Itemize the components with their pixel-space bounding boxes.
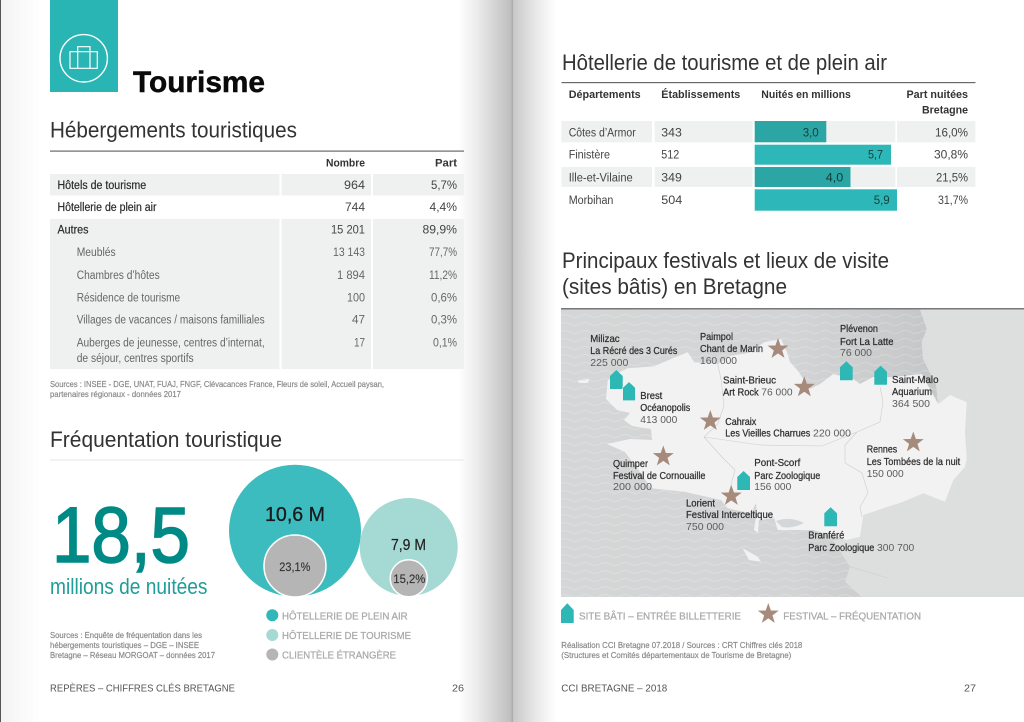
map label: Saint-Malo: Aquarium [892,386,932,398]
section tab with suitcase icon [50,0,118,92]
table: hébergements: Nombre [326,158,365,170]
title: Tourisme [133,66,265,99]
map label: Quimper [613,458,706,493]
map label: Lorient: 750 000 [686,521,724,533]
map label: Milizac: Milizac [590,333,620,345]
table: nuitées par département: Nuités en millions [761,89,851,101]
map label: Branféré [808,530,914,554]
islands and peninsula [578,379,761,562]
gulf of Morbihan [776,519,804,528]
footer: right page: 27 [964,684,976,694]
table: nuitées par département: 504 [661,195,683,207]
credits: Réalisation CCI Bretagne 07.2018 / Sources : CRT Chiffres clés 2018 [561,640,803,650]
table: hébergements: Part [435,158,457,170]
map label: Pont-Scorf: Parc Zoologique [754,470,820,482]
footer: left page: 26 [452,684,464,694]
bars: nuitées en millions: 3,0 [803,127,819,139]
credits: (Structures et Comités départementaux de Tourisme de Bretagne) [561,650,791,660]
sources: hébergements: Sources : INSEE - DGE, UNAT, FUAJ, FNGF, Clévacances France, Fleurs de soleil, Accueil paysan, [50,379,384,389]
map label: Saint-Brieuc: 76 000 [761,386,793,398]
table: hébergements: 4,4% [430,202,457,214]
bubble chart: hôtellerie de tourisme: 7,9 M [391,537,426,554]
legend: map [561,603,921,623]
map label: Rennes: 150 000 [867,468,904,480]
map label: Branféré: 300 700 [877,542,914,554]
table: hébergements: 0,1% [433,338,457,350]
heading: principaux festivals [562,248,889,299]
table: nuitées par département: Côtes d’Armor [569,127,636,139]
table: hébergements: 100 [347,292,365,304]
table: hébergements: 89,9% [422,224,457,236]
map label: Plévenon: Fort La Latte [840,336,894,348]
map label: Quimper: Quimper [613,458,648,470]
table: nuitées par département: Morbihan [569,195,613,207]
bubble chart: hôtellerie de tourisme [360,498,458,597]
legend: map: SITE BÂTI – ENTRÉE BILLETTERIE [579,610,741,622]
map label: Brest: Brest [640,390,662,402]
map label: Cahraix: Cahraix [725,416,757,428]
map label: Saint-Malo: Saint-Malo [892,374,939,386]
table: hébergements: 1 894 [337,270,366,282]
table: hébergements: Autres [58,224,89,236]
table: hébergements: Hôtellerie de plein air [58,202,157,214]
footer: right page: CCI BRETAGNE – 2018 [561,684,668,694]
table: nuitées par département: Bretagne [922,104,968,116]
table: nuitées par département: Finistère [569,150,610,162]
bubble chart: hôtellerie de tourisme: 15,2% [393,574,425,586]
sources: fréquentation: hébergements touristiques – DGE – INSEE [50,640,199,650]
panel: right page [561,50,1024,694]
table: hébergements: 964 [344,180,366,192]
map label: Milizac: La Récré des 3 Curés [590,345,677,357]
sources: hébergements [50,379,384,399]
bars: nuitées en millions: 5,9 [874,195,890,207]
heading: fréquentation touristique: Fréquentation touristique [50,427,282,452]
map label: Lorient: Lorient [686,498,715,510]
table: hébergements: Hôtels de tourisme [58,180,146,192]
map label: Lorient [686,498,773,533]
table: hébergements: 47 [352,314,365,326]
table: nuitées par département: 512 [661,150,679,162]
table: hébergements [50,158,464,369]
sources: fréquentation [50,630,215,660]
bars: nuitées en millions [755,121,897,211]
sources: fréquentation: Sources : Enquête de fréquentation dans les [50,630,202,640]
map label: Milizac: 225 000 [590,357,628,369]
bars: nuitées en millions: 4,0 [826,172,843,184]
map label: Rennes [867,444,960,480]
map background: sea [561,310,1024,597]
map label: Brest: 413 000 [640,414,677,426]
table: nuitées par département [561,88,975,211]
table: hébergements: 5,7% [431,180,457,192]
legend: map: FESTIVAL – FRÉQUENTATION [783,610,921,622]
map: Bretagne [561,310,1024,597]
legend: bubble chart [266,609,411,662]
table: nuitées par département: 30,8% [934,150,968,162]
table: hébergements: Villages de vacances / maisons familliales [77,314,265,326]
department borders [704,364,888,578]
map label: Plévenon [840,323,894,359]
map label: Lorient: Festival Interceltique [686,509,773,521]
bubble chart: hôtellerie de plein air: 10,6 M [265,504,325,526]
footer: right page [561,684,976,694]
table: hébergements: 11,2% [429,270,457,282]
table: hébergements: Auberges de jeunesse, centres d’internat, [77,338,265,350]
map label: Plévenon: Plévenon [840,323,878,335]
heading: hôtellerie de tourisme et de plein air: Hôtellerie de tourisme et de plein air [562,50,887,75]
table: nuitées par département: 349 [661,172,682,184]
map label: Saint-Brieuc [723,374,793,398]
footer: left page: REPÈRES – CHIFFRES CLÉS BRETAGNE [50,682,235,694]
heading: principaux festivals: Principaux festivals et lieux de visite [562,248,889,273]
map label: Paimpol [700,331,763,367]
footer: left page [50,682,464,694]
table: hébergements: 0,3% [431,314,457,326]
sources: fréquentation: Bretagne – Réseau MORGOAT – données 2017 [50,650,215,660]
map label: Paimpol: 160 000 [700,355,737,367]
key figure: 18,5 millions de nuitées: 18,5 [52,490,190,579]
legend: bubble chart: HÔTELLERIE DE PLEIN AIR [282,610,408,622]
table: hébergements: 15 201 [331,224,365,236]
table: nuitées par département: 343 [661,127,682,139]
map markers: festivals [653,338,924,505]
neighbouring land [833,310,1024,597]
map label: Quimper: Festival de Cornouaille [613,470,706,482]
map label: Paimpol: Paimpol [700,331,733,343]
table: hébergements: 0,6% [431,292,457,304]
table: hébergements: de séjour, centres sportifs [77,353,194,365]
bubble chart: hôtellerie de plein air: 23,1% [279,562,310,574]
map label: Saint-Malo: 364 500 [892,398,930,410]
table: nuitées par département: 21,5% [936,172,968,184]
heading: principaux festivals: (sites bâtis) en Bretagne [562,274,787,299]
map label: Pont-Scorf: 156 000 [754,481,791,493]
bars: nuitées en millions: 5,7 [868,150,883,162]
table: nuitées par département: Départements [569,89,641,101]
map label: Paimpol: Chant de Marin [700,343,763,355]
key figure: 18,5 millions de nuitées: millions de nuitées [50,574,208,599]
map label: Saint-Malo [892,374,939,410]
table: hébergements: Chambres d’hôtes [77,270,160,282]
map label: Quimper: 200 000 [613,481,652,493]
map label: Cahraix: Les Vieilles Charrues [725,428,810,440]
map label: Milizac [590,333,677,369]
legend: bubble chart: CLIENTÈLE ÉTRANGÈRE [282,648,396,662]
table: nuitées par département: Ille-et-Vilaine [569,172,633,184]
panel: left page [50,0,464,694]
table: hébergements: 744 [345,202,366,214]
bubble chart: hôtellerie de plein air [229,465,361,597]
heading: hébergements touristiques: Hébergements touristiques [50,118,297,142]
table: nuitées par département: 31,7% [938,195,968,207]
land: Brittany [606,339,967,540]
table: hébergements: Meublés [77,247,116,259]
table: hébergements: Résidence de tourisme [77,292,180,304]
table: hébergements: 13 143 [333,247,365,259]
map label: Saint-Brieuc: Art Rock [723,386,759,398]
map label: Rennes: Rennes [867,444,897,456]
table: hébergements: 77,7% [429,247,457,259]
map label: Pont-Scorf [754,457,820,493]
map label: Cahraix: 220 000 [813,428,851,440]
sources: hébergements: partenaires régionaux - données 2017 [50,389,181,399]
map label: Branféré: Branféré [808,530,844,542]
table: nuitées par département: Établissements [661,88,740,101]
credits [561,640,803,660]
map label: Pont-Scorf: Pont-Scorf [754,457,800,469]
map label: Brest [640,390,690,426]
map label: Saint-Brieuc: Saint-Brieuc [723,374,776,386]
legend: bubble chart: HÔTELLERIE DE TOURISME [282,629,411,642]
table: hébergements: 17 [354,338,365,350]
map label: Plévenon: 76 000 [840,347,872,359]
map markers: built sites [610,361,887,526]
map label: Cahraix [725,416,851,440]
table: nuitées par département: 16,0% [935,127,968,139]
table: nuitées par département: Part nuitées [906,89,968,101]
map label: Rennes: Les Tombées de la nuit [867,456,960,468]
map label: Branféré: Parc Zoologique [808,542,874,554]
map label: Brest: Océanopolis [640,402,690,414]
